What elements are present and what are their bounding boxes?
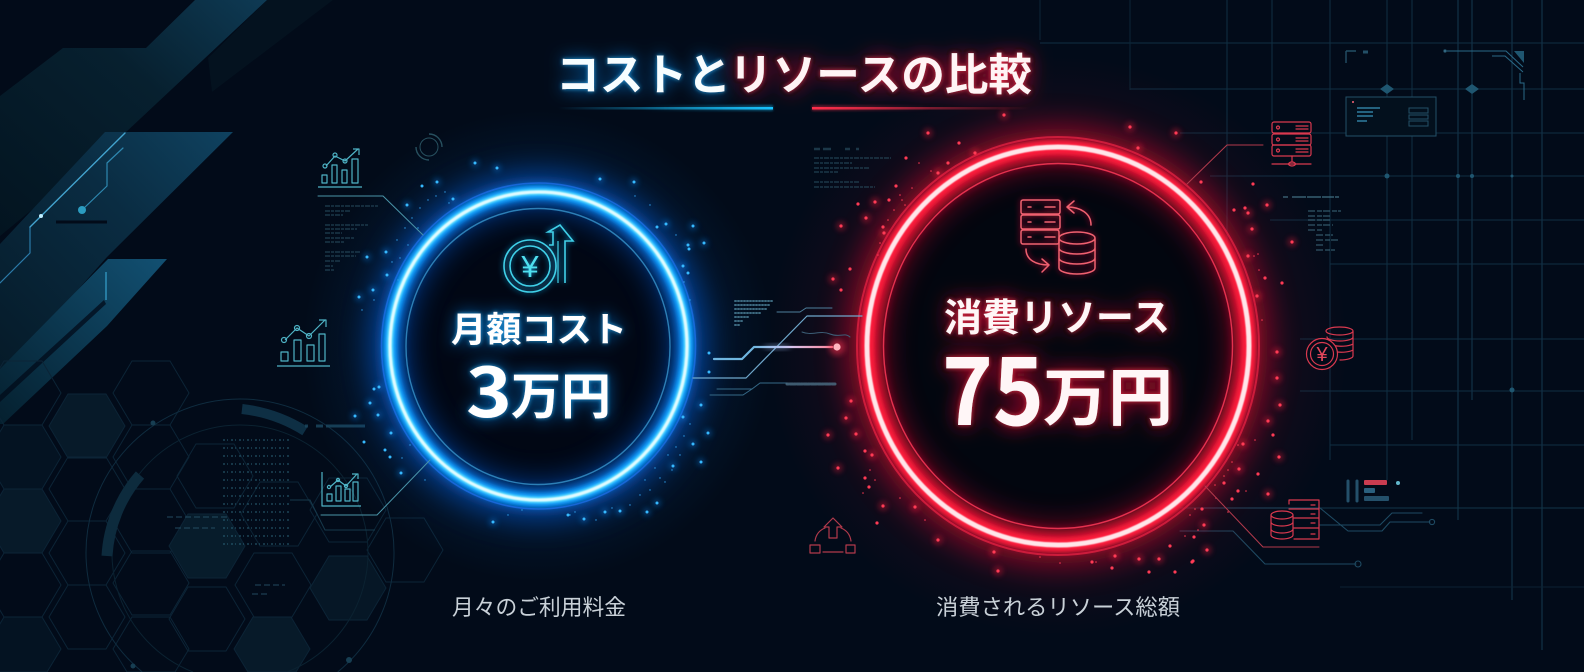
value: 3万円: [466, 338, 611, 437]
icon: share arrow: [810, 518, 855, 553]
icon: chart, lower: [322, 472, 361, 506]
panel: diagonal tech bands, top left: [0, 0, 333, 424]
halo: blue: [303, 106, 773, 586]
caption: monthly fee: 月々のご利用料金: [452, 590, 626, 622]
status bars, bottom right: [1348, 480, 1400, 501]
connector: chart lower to ring: [321, 460, 430, 515]
value: 3万円: 万円: [511, 357, 611, 429]
panel: circuit grid, top right: [1040, 0, 1584, 650]
panel: dashboard widget, top right: [1346, 50, 1524, 136]
label: resources: 消費リソース: [944, 287, 1170, 342]
icon: server and database: [1021, 200, 1095, 274]
yen sign: ¥: [520, 249, 539, 284]
icon: chart, middle: [277, 320, 330, 366]
value: 75万円: 75: [942, 319, 1044, 452]
circle: resources: [857, 137, 1259, 555]
icon: coins and yen: [1306, 327, 1353, 370]
title: cost part: コストと: [556, 39, 731, 103]
icon: gauge ring: [416, 134, 442, 160]
connector: server rack to ring: [1187, 145, 1263, 184]
circuit lines, bottom right: [1180, 508, 1435, 567]
title underline: red: [812, 105, 1030, 111]
label: monthly cost: 月額コスト: [451, 302, 627, 353]
title: resource part: リソースの比較: [729, 39, 1032, 103]
halo: red: [768, 51, 1348, 641]
code snippets, right: [1283, 197, 1341, 250]
caption: total resources: 消費されるリソース総額: [936, 590, 1180, 622]
connector: chart upper to ring: [318, 196, 423, 235]
code snippet, left: [325, 206, 378, 270]
panel: radar dial, bottom left: [86, 399, 394, 672]
circle: monthly cost: [382, 183, 696, 509]
icon: yen coin with arrow: [504, 225, 573, 292]
particles: red: [828, 115, 1292, 572]
title: [556, 39, 1032, 103]
value: 3万円: 3: [466, 338, 512, 437]
icon: chart, upper: [318, 149, 362, 187]
icon: server rack: [1272, 122, 1311, 166]
grid nodes: [1380, 84, 1514, 392]
code snippet, upper centre: [814, 149, 891, 187]
panel: hexagon lattice, bottom left: [0, 361, 443, 672]
particles: blue: [355, 163, 708, 522]
title underline: blue: [558, 105, 773, 111]
connector: database to ring: [1205, 486, 1319, 547]
connectors between circles: [693, 301, 862, 395]
icon: database and server: [1271, 500, 1319, 539]
value: 75万円: [942, 319, 1173, 452]
yen sign, red: ¥: [1315, 344, 1328, 366]
value: 75万円: 万円: [1043, 348, 1173, 439]
